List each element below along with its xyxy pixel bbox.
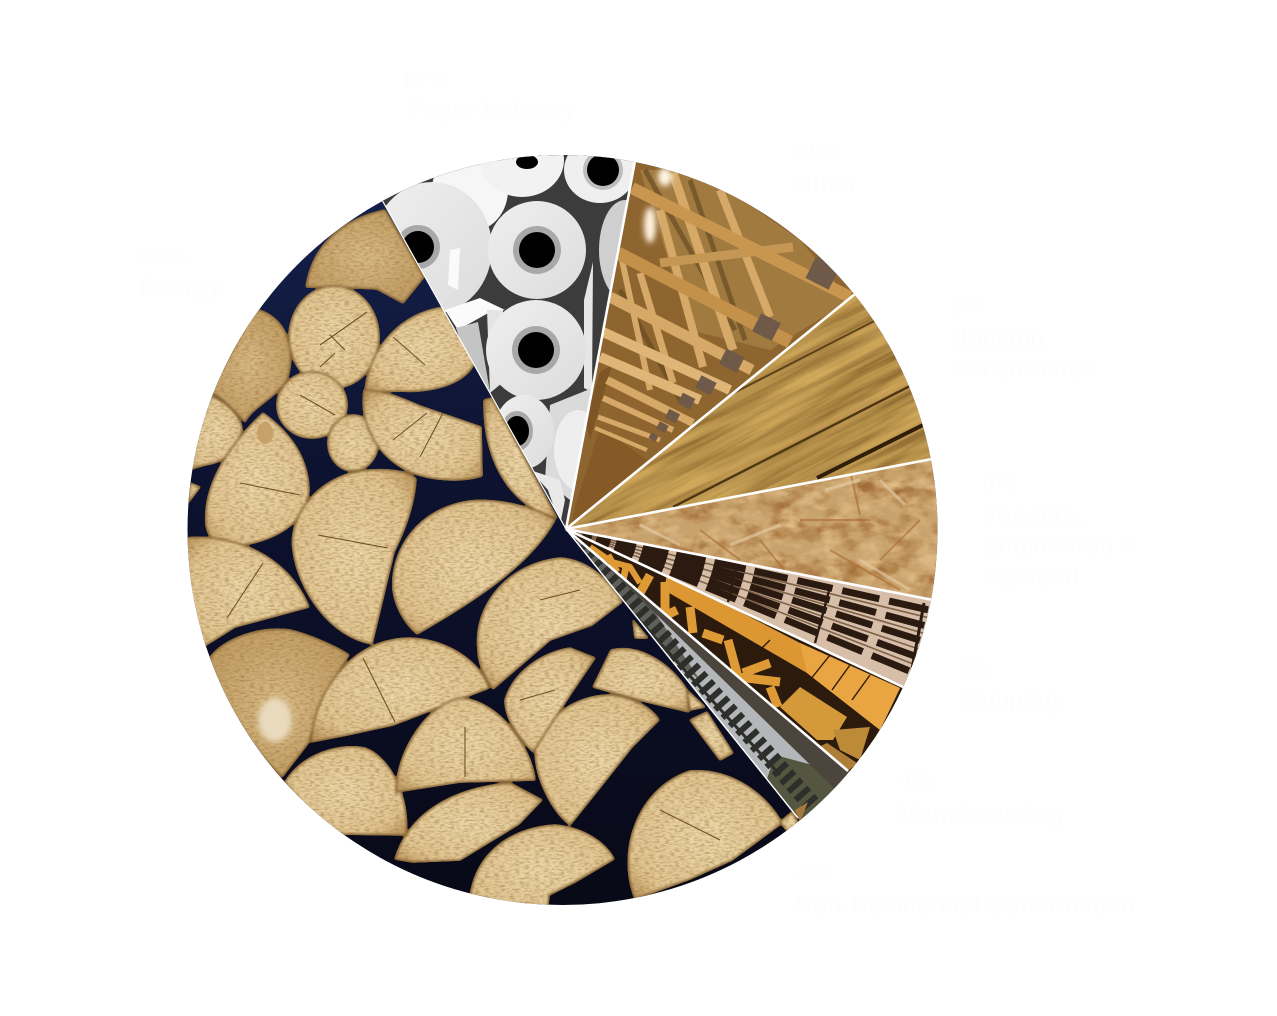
label: non-residential construction (795, 859, 1135, 919)
slice: housing construction, lumber boards (570, 294, 931, 527)
label: manufacturing: Manufacturing (898, 801, 1063, 828)
label: other: Other (793, 171, 858, 198)
label: paper industry: Paper Industry (407, 97, 577, 124)
label: shipping (958, 657, 1059, 714)
label: shipping: Shipping (958, 687, 1059, 714)
slice: roof truss framing (574, 534, 903, 772)
white slice separators (382, 161, 933, 818)
label: housing construction: 8% (950, 292, 987, 319)
label: veneers, engineered and plywood: 6% (982, 469, 1019, 496)
slice: manufacturing, rail structure (573, 536, 850, 820)
label: veneers, engineered and plywood: Plywood (982, 564, 1080, 591)
slice: other, roof trusses (568, 162, 854, 526)
slice: shipping, wooden pallets (576, 532, 931, 688)
label: energy: 53% (138, 243, 189, 270)
label: paper industry: 11% (400, 66, 449, 93)
label: non-residential construction: 3% (797, 859, 834, 886)
label: paper industry (400, 66, 577, 124)
label: veneers, engineered and plywood: Engineered & (982, 532, 1139, 559)
label: energy (138, 243, 222, 301)
label: housing construction: Housing (950, 326, 1045, 353)
label: veneers, engineered and plywood: Veneers, (982, 502, 1085, 529)
label: housing construction: Construction (950, 356, 1097, 383)
slice: paper industry, paper rolls (382, 155, 635, 526)
label: other: 11% (793, 139, 842, 166)
log cracks and knots (227, 312, 720, 840)
label: energy: Energy (140, 274, 222, 301)
label: shipping: 4% (958, 657, 995, 684)
label: manufacturing (898, 767, 1063, 828)
label: veneers, engineered and plywood (982, 469, 1139, 591)
pie chart: wood uses by sector (188, 155, 938, 905)
slice: energy, stacked firewood logs (180, 150, 950, 920)
label: other (793, 139, 858, 198)
label: housing construction (950, 292, 1097, 383)
slice: veneers, engineered and plywood, OSB board (573, 459, 938, 599)
label: non-residential construction: Non-Residential Construction (795, 892, 1135, 919)
label: manufacturing: 4% (898, 767, 935, 794)
